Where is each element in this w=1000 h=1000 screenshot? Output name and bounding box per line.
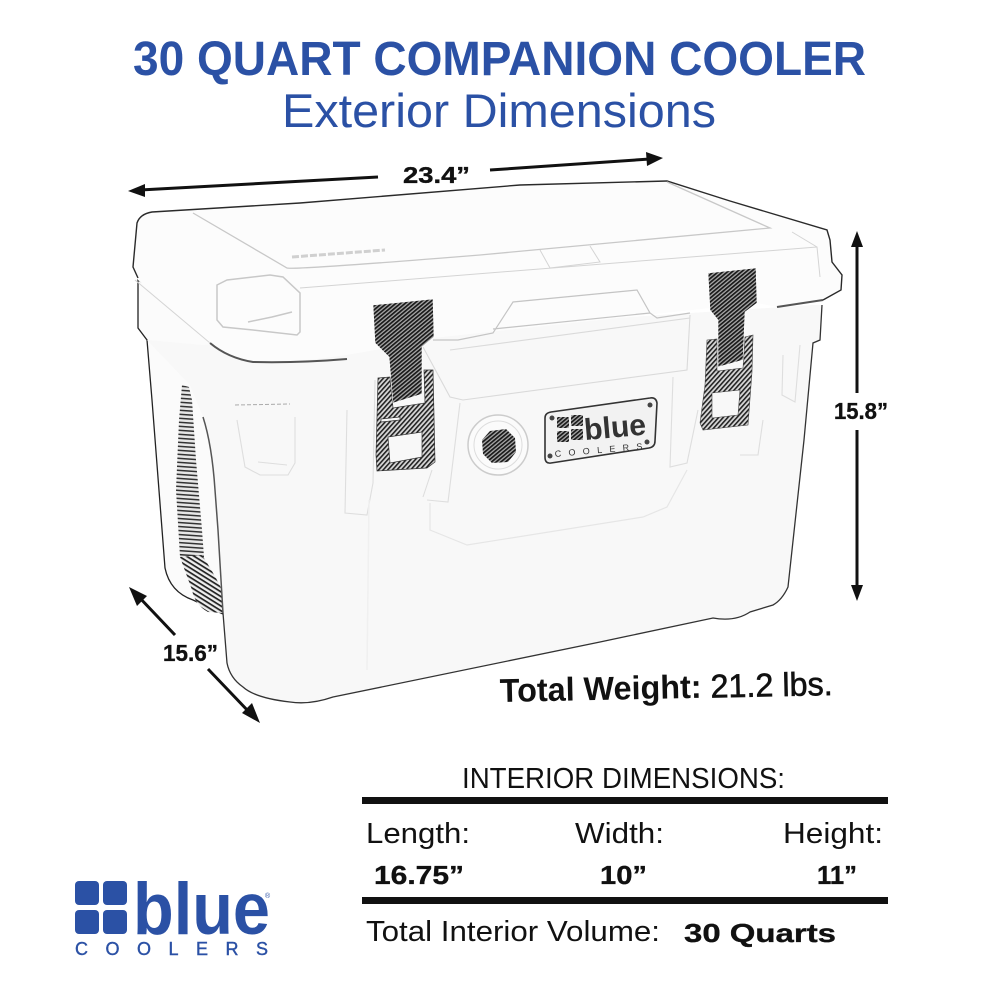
total interior volume: Total Interior Volume: xyxy=(366,916,660,948)
interior dimensions table xyxy=(362,763,888,948)
dimension: width 15.6 xyxy=(129,587,260,723)
front handle xyxy=(433,290,690,340)
blue coolers logo: blue xyxy=(133,869,270,950)
left latch lower ring xyxy=(376,370,435,471)
subtitle: Exterior Dimensions xyxy=(282,84,716,137)
lid embossed logo xyxy=(292,250,385,257)
table heading: INTERIOR DIMENSIONS: xyxy=(462,763,785,795)
cooler body outline xyxy=(223,305,822,703)
cooler front body xyxy=(147,305,822,703)
lid seam xyxy=(210,300,823,362)
lid corner tie-down xyxy=(217,275,300,335)
lid xyxy=(133,181,842,362)
blue coolers logo xyxy=(75,869,271,959)
width column: Width: xyxy=(575,818,664,850)
cooler rear side body xyxy=(138,280,240,615)
title: 30 QUART COMPANION COOLER xyxy=(133,33,866,86)
dimension: length 23.4 xyxy=(128,152,663,197)
handle lower band xyxy=(423,315,690,400)
lid recessed panel xyxy=(193,182,770,268)
column and pocket details xyxy=(237,345,800,515)
cooler illustration xyxy=(133,181,842,703)
height column: 11” xyxy=(817,860,857,890)
front recessed panel xyxy=(430,470,687,545)
right latch top tab xyxy=(708,268,757,367)
badge logo plate xyxy=(545,398,657,463)
height column: Height: xyxy=(783,818,883,850)
blue coolers logo: ® xyxy=(265,892,271,900)
total interior volume: 30 Quarts xyxy=(684,918,836,948)
total interior volume xyxy=(366,916,836,948)
dimension: height 15.8: 15.8” xyxy=(834,398,888,424)
length column: Length: xyxy=(366,818,470,850)
left latch top tab xyxy=(373,299,434,403)
side handle strap xyxy=(176,385,204,557)
badge logo plate: COOLERS xyxy=(554,441,643,459)
right latch lower ring xyxy=(700,335,753,430)
side pocket top edge xyxy=(235,404,290,405)
width column xyxy=(575,818,664,890)
dimension: height 15.8 xyxy=(834,231,888,601)
dimension: width 15.6: 15.6” xyxy=(163,640,218,666)
length column xyxy=(366,818,470,890)
width column: 10” xyxy=(600,860,647,890)
blue coolers logo: COOLERS xyxy=(75,939,268,959)
dimension: length 23.4: 23.4” xyxy=(403,162,470,188)
badge logo plate: blue xyxy=(583,409,647,447)
lid faint front edges xyxy=(135,232,820,343)
side panel edge xyxy=(203,417,223,613)
total weight: Total Weight: 21.2 lbs. xyxy=(499,665,833,709)
lid outline xyxy=(133,181,842,300)
height column xyxy=(783,818,883,890)
faint body seam xyxy=(367,500,369,670)
drain plug xyxy=(468,415,528,475)
strap loop xyxy=(180,555,223,613)
length column: 16.75” xyxy=(374,860,464,890)
